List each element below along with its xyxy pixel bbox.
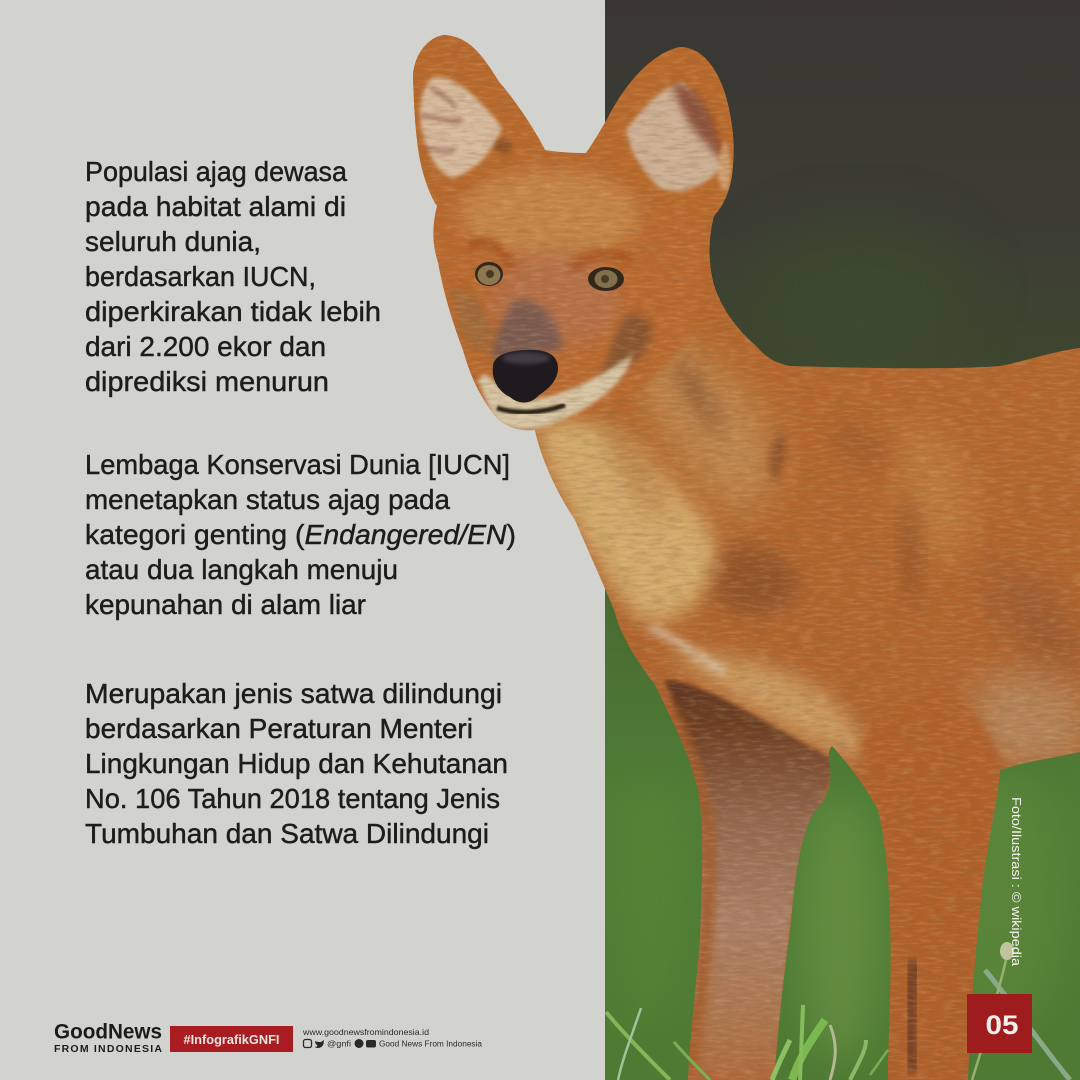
icon: twitter xyxy=(314,1040,324,1048)
snout bridge grey xyxy=(490,299,562,360)
background: left grey panel xyxy=(0,0,605,1080)
body text 2: kategori genting (Endangered/EN) xyxy=(85,519,516,550)
body text 1 xyxy=(85,156,381,397)
body text 3: Lingkungan Hidup dan Kehutanan xyxy=(85,748,508,779)
website and social media handles: Good News From Indonesia xyxy=(379,1040,483,1048)
left ear xyxy=(413,35,545,206)
left ear streaks xyxy=(422,88,462,151)
dhole base fur xyxy=(400,30,1080,1080)
chest pale fur xyxy=(535,420,720,622)
right brow xyxy=(572,254,632,270)
body text 3: berdasarkan Peraturan Menteri xyxy=(85,713,473,744)
flank dark upper xyxy=(834,424,886,468)
right eye xyxy=(588,267,624,291)
head base xyxy=(434,206,684,421)
body text 1: Populasi ajag dewasa xyxy=(85,156,347,187)
left brow xyxy=(468,242,512,268)
fur grain light xyxy=(400,30,1080,1080)
body text 1: berdasarkan IUCN, xyxy=(85,261,316,292)
neck mid tone xyxy=(599,432,671,519)
flank dark rear xyxy=(986,566,1080,670)
flower bud xyxy=(1000,942,1014,960)
body text 1: seluruh dunia, xyxy=(85,226,261,257)
white chest patch xyxy=(650,628,725,672)
front leg orange edge xyxy=(660,690,709,1075)
body text 2: Lembaga Konservasi Dunia [IUCN] xyxy=(85,449,510,480)
cheek dark right xyxy=(595,314,651,382)
mouth line xyxy=(497,405,565,412)
left ear inner xyxy=(420,77,502,178)
background: blurred meadow photo xyxy=(605,0,1080,1080)
nose xyxy=(493,350,558,402)
body text 3 xyxy=(85,678,508,849)
logo: GoodNews From Indonesia: FROM INDONESIA xyxy=(54,1043,162,1055)
muzzle reddish xyxy=(490,250,620,350)
logo: GoodNews From Indonesia: GoodNews xyxy=(54,1020,162,1044)
left cheek mottled xyxy=(450,285,495,351)
hashtag badge: #InfografikGNFI xyxy=(184,1032,280,1047)
icon: youtube xyxy=(366,1040,376,1048)
mouth pale fur xyxy=(478,355,632,430)
body text 2: atau dua langkah menuju xyxy=(85,554,398,585)
chest crease dark xyxy=(715,544,800,615)
body text 1: diprediksi menurun xyxy=(85,366,329,397)
body text 2: menetapkan status ajag pada xyxy=(85,484,450,515)
website and social media handles xyxy=(302,1027,483,1048)
body text 1: dari 2.200 ekor dan xyxy=(85,331,326,362)
body text 3: No. 106 Tahun 2018 tentang Jenis xyxy=(85,783,500,814)
body text 1: diperkirakan tidak lebih xyxy=(85,296,381,327)
flank pale rear xyxy=(975,674,1080,768)
left eye xyxy=(475,262,503,286)
website and social media handles: www.goodnewsfromindonesia.id xyxy=(302,1027,429,1037)
website and social media handles: @gnfi xyxy=(327,1040,351,1048)
body text 1: pada habitat alami di xyxy=(85,191,346,222)
icon: instagram xyxy=(304,1040,312,1048)
page number badge: 05 xyxy=(986,1010,1018,1040)
photo credit: Foto/Ilustrasi : © wikipedia xyxy=(1009,797,1024,967)
right ear inner xyxy=(626,82,720,191)
right ear lower rim xyxy=(717,140,731,192)
right ear xyxy=(594,47,730,171)
right ear dark recess xyxy=(672,84,722,160)
body text 2 xyxy=(85,449,516,620)
flank dark stripe xyxy=(900,490,922,620)
fur grain dark xyxy=(400,30,1080,1080)
hashtag badge xyxy=(170,1026,293,1052)
forehead highlight xyxy=(460,170,640,260)
logo: GoodNews From Indonesia xyxy=(54,1020,162,1055)
neck shadow stripe xyxy=(675,355,722,440)
front leg xyxy=(665,680,835,1080)
body text 3: Merupakan jenis satwa dilindungi xyxy=(85,678,502,709)
photo: dhole (ajag) xyxy=(400,30,1080,1080)
icon: facebook xyxy=(354,1039,364,1048)
left ear base shadow xyxy=(494,139,512,153)
back leg xyxy=(862,690,1005,1080)
grass tufts xyxy=(606,960,1070,1080)
flank highlight xyxy=(900,420,972,562)
back leg dark fur streak xyxy=(909,960,915,1072)
neck tan xyxy=(640,330,774,520)
body text 3: Tumbuhan dan Satwa Dilindungi xyxy=(85,818,489,849)
shoulder dark mark xyxy=(770,430,785,480)
body text 2: kepunahan di alam liar xyxy=(85,589,366,620)
page number badge xyxy=(967,994,1032,1053)
chest lower pale band xyxy=(660,640,864,760)
